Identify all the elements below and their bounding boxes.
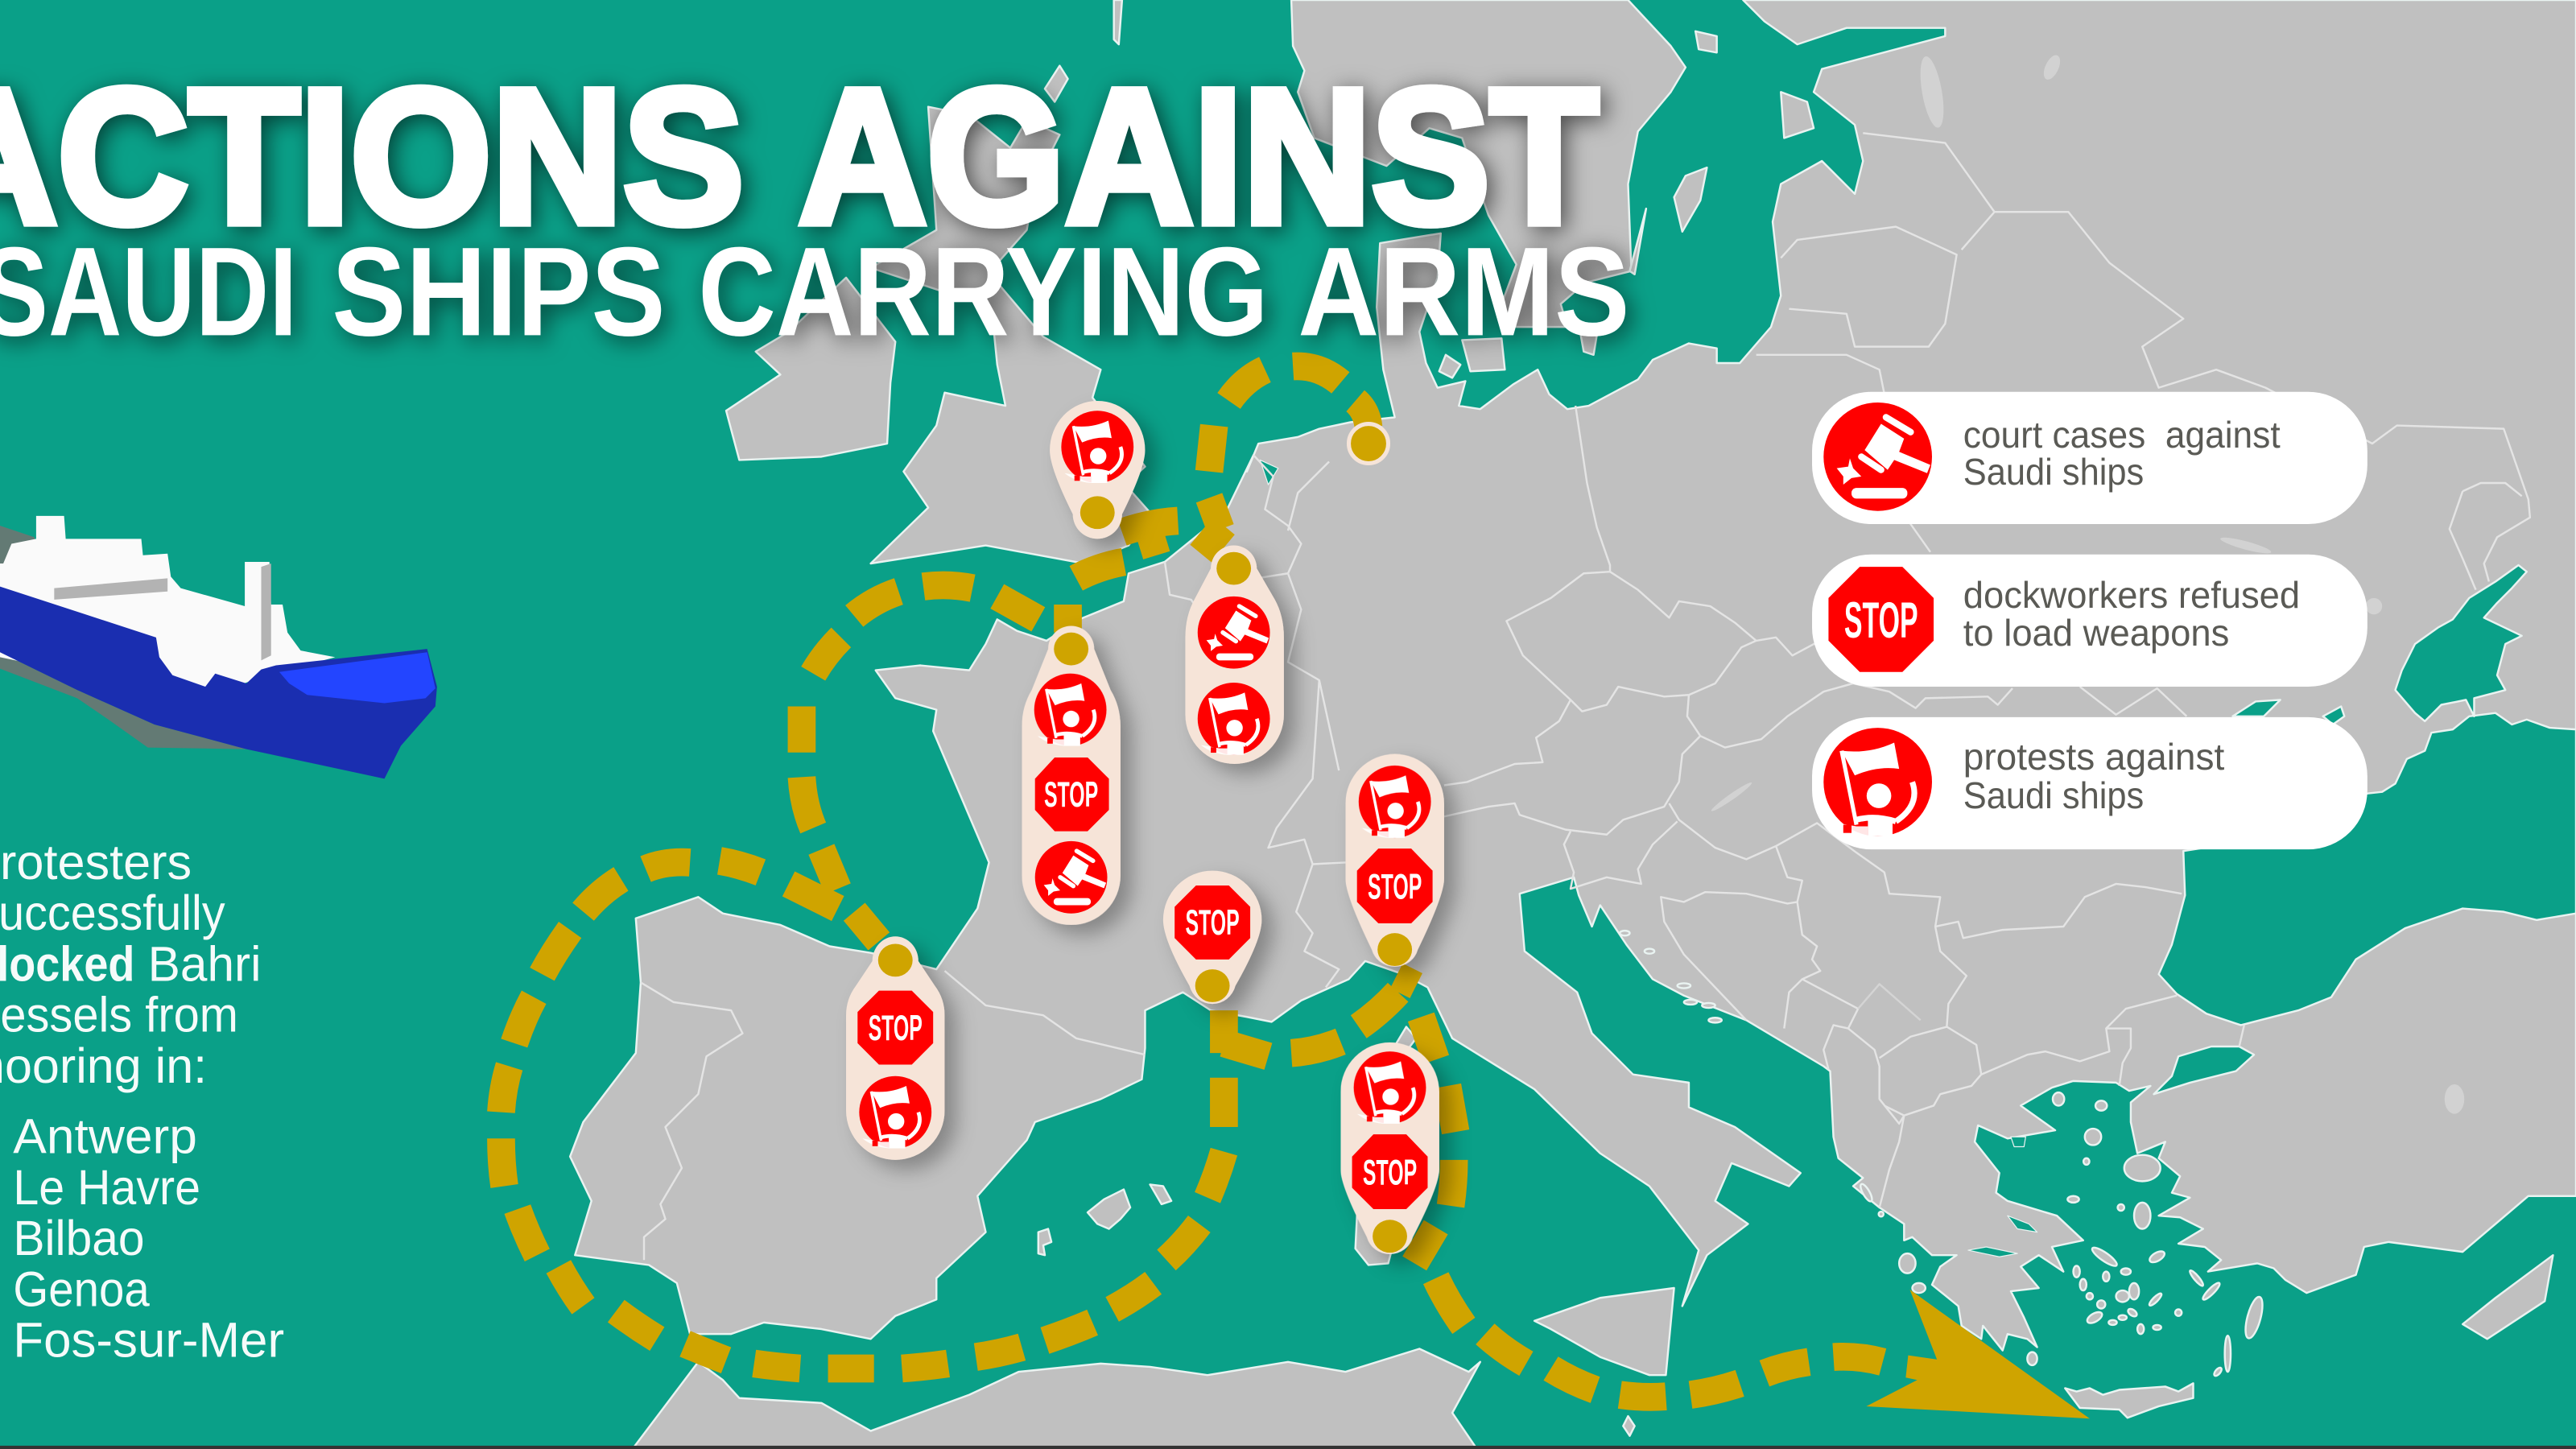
land: North Africa xyxy=(633,1349,1480,1449)
heading line 2: ARMS xyxy=(1298,221,1629,362)
map of Europe xyxy=(570,0,2576,1449)
land: islands xyxy=(1038,0,2553,1436)
text block: protesters blocked vessels: Bahri xyxy=(148,936,261,991)
pin: Le Havre xyxy=(1022,626,1121,925)
heading line 2: CARRYING xyxy=(698,221,1269,362)
text block: protesters blocked vessels: Le Havre xyxy=(13,1160,200,1215)
heading line 2: SHIPS xyxy=(332,221,666,362)
pin: Genoa xyxy=(1345,754,1444,967)
heading line 1: AGAINST xyxy=(799,49,1599,264)
legend: protests: protests against xyxy=(1963,736,2224,778)
title xyxy=(0,49,1629,362)
country borders xyxy=(641,133,2530,1260)
pin: Bilbao xyxy=(846,936,944,1160)
text block: protesters blocked vessels xyxy=(0,835,284,1368)
lakes xyxy=(1710,52,2464,1114)
heading line 1 xyxy=(0,49,1599,264)
pin: Bremerhaven dot xyxy=(1349,424,1388,464)
pin: Genoa: STOP xyxy=(1368,865,1422,906)
land: Ireland xyxy=(726,278,895,460)
legend: dockworkers refused xyxy=(1812,555,2368,687)
land: Great Britain xyxy=(871,107,1150,564)
pin: UK xyxy=(1050,401,1145,539)
legend: court cases: court cases against xyxy=(1963,414,2281,456)
pin: Fos-sur-Mer xyxy=(1163,871,1261,1004)
text block: protesters blocked vessels: Bilbao xyxy=(13,1211,145,1265)
seas: Black Sea, Azov, Marmara and gulfs xyxy=(1260,460,2576,1257)
pin: Fos-sur-Mer: STOP xyxy=(1185,902,1240,943)
icon: ship xyxy=(0,516,437,778)
heading line 2 xyxy=(0,221,1629,362)
land: continental Europe xyxy=(570,0,2576,1351)
pin: Sardinia / Sicily: STOP xyxy=(1363,1151,1417,1192)
pin: Antwerp xyxy=(1185,546,1284,764)
legend: court cases: Saudi ships xyxy=(1963,451,2144,493)
legend: dockworkers refused: STOP xyxy=(1844,592,1918,649)
pin: Le Havre: STOP xyxy=(1044,774,1098,815)
land: Scandinavia xyxy=(1291,0,1686,327)
text block: protesters blocked vessels: Fos-sur-Mer xyxy=(13,1313,284,1368)
arrowhead xyxy=(1866,1290,2090,1418)
legend: protests xyxy=(1812,717,2368,849)
legend: dockworkers refused: dockworkers refused xyxy=(1963,574,2300,616)
route: dashed shipping route of the Bahri vessel xyxy=(501,366,2090,1418)
pin: Sardinia / Sicily xyxy=(1340,1042,1439,1254)
legend: court cases xyxy=(1812,392,2368,524)
text block: protesters blocked vessels: Genoa xyxy=(13,1261,151,1316)
text block: protesters blocked vessels: Antwerp xyxy=(13,1109,197,1164)
pin: Bilbao: STOP xyxy=(869,1007,923,1048)
legend: dockworkers refused: to load weapons xyxy=(1963,612,2229,654)
legend: protests: Saudi ships xyxy=(1963,774,2144,816)
